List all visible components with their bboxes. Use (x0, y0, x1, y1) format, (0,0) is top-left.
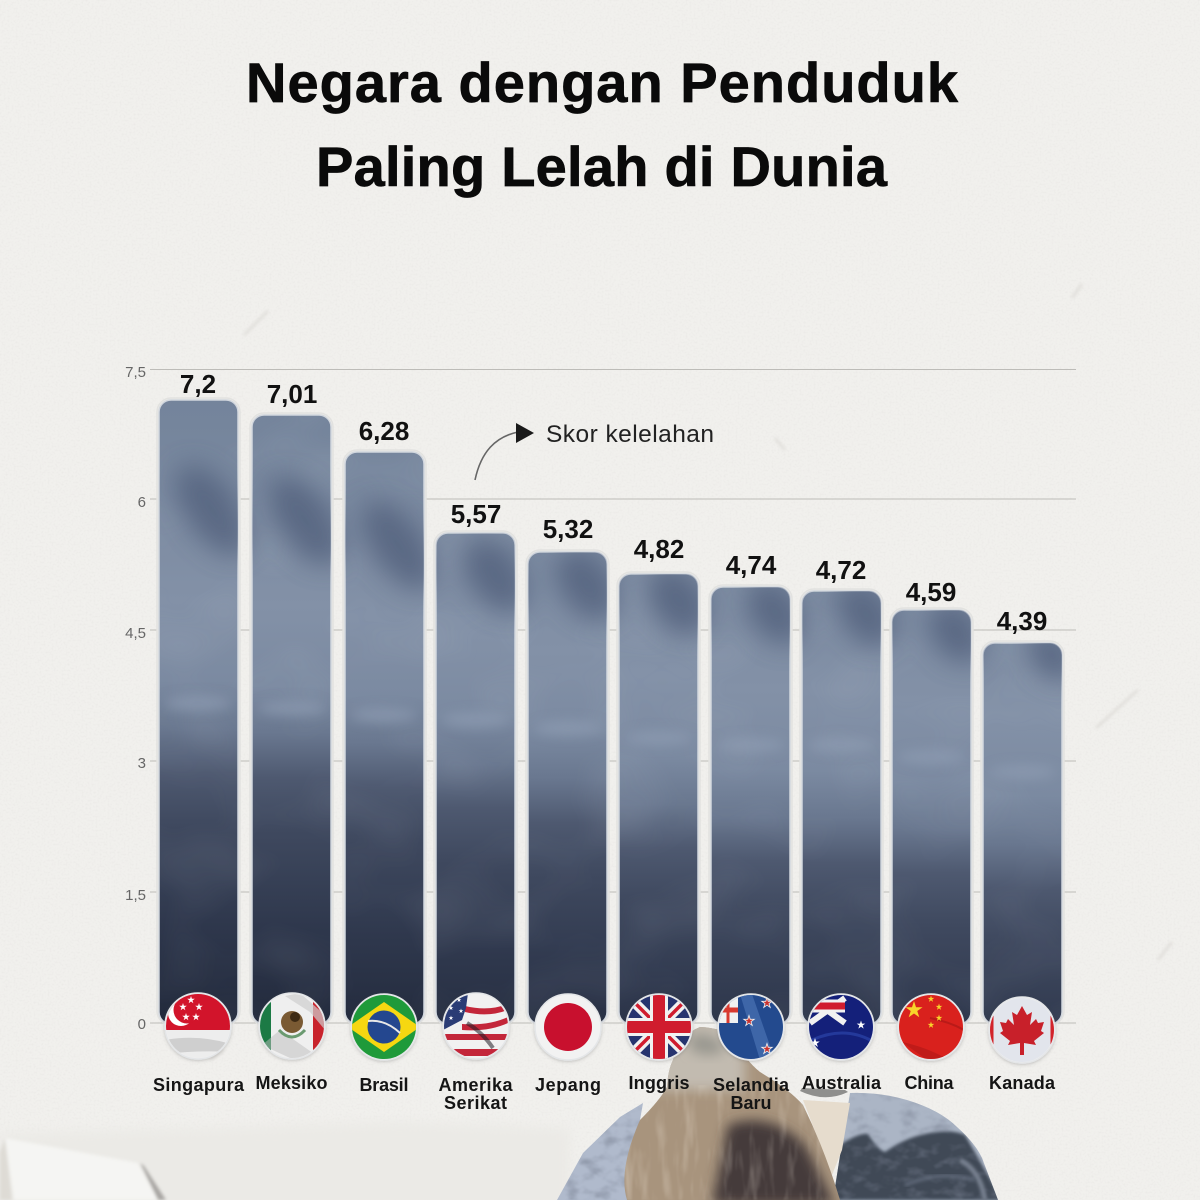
value labels: 5,32 (543, 514, 593, 544)
flag: Inggris (626, 994, 692, 1060)
y axis gridlines and labels: 4,5 (125, 625, 146, 642)
country labels: Jepang (535, 1075, 601, 1095)
background photo: tired person (550, 1020, 1002, 1200)
bar chart (157, 398, 1064, 1025)
value labels: 4,82 (634, 534, 684, 564)
flag: Brasil (348, 994, 420, 1060)
title: Negara dengan Penduduk (246, 51, 959, 114)
bar: Inggris (617, 572, 700, 1025)
person: hair (624, 1027, 840, 1200)
person: collar shadow (800, 1088, 848, 1097)
value labels: 4,72 (816, 555, 866, 585)
country labels: Australia (802, 1073, 882, 1093)
value labels: 6,28 (359, 416, 409, 446)
country labels: Amerika (438, 1075, 513, 1095)
person: right sweater (830, 1090, 1002, 1200)
annotation label: Skor kelelahan (546, 421, 714, 448)
flag: Jepang (535, 994, 601, 1060)
y axis gridlines and labels: 1,5 (125, 887, 146, 904)
country labels: Meksiko (256, 1073, 328, 1093)
flag: Australia (808, 994, 874, 1060)
country labels: China (904, 1073, 954, 1093)
bar: Brasil (343, 450, 426, 1025)
value labels: 4,74 (726, 550, 777, 580)
bar: China (890, 608, 973, 1025)
person: collar skin (803, 1100, 850, 1175)
country labels: Brasil (360, 1075, 408, 1095)
bar: Selandia Baru (709, 585, 792, 1025)
bar: Australia (800, 589, 883, 1025)
bar: Singapura (157, 398, 240, 1025)
y axis gridlines and labels: 3 (138, 755, 146, 772)
country labels: Kanada (989, 1073, 1056, 1093)
value labels (180, 369, 1047, 636)
arrow: score annotation (475, 423, 534, 480)
country labels: Baru (730, 1093, 772, 1113)
bar: Jepang (526, 550, 609, 1025)
flag: Singapura (165, 993, 231, 1060)
flag: Amerika Serikat (443, 993, 510, 1059)
y axis gridlines and labels: 6 (138, 494, 146, 511)
y axis gridlines and labels: 7,5 (125, 364, 146, 381)
value labels: 4,39 (997, 606, 1047, 636)
flag: Kanada (989, 997, 1055, 1063)
bar: Meksiko (250, 413, 333, 1025)
flag: Meksiko (259, 993, 325, 1059)
country labels: Singapura (153, 1075, 245, 1095)
person: left sleeve (557, 1103, 643, 1200)
bar cloud texture (159, 459, 1062, 986)
title (246, 51, 959, 198)
y axis gridlines and labels: 0 (138, 1016, 146, 1033)
y axis gridlines and labels (125, 364, 1076, 1033)
background photo: laptop (0, 1138, 166, 1200)
value labels: 4,59 (906, 577, 956, 607)
country labels: Selandia (713, 1075, 790, 1095)
bar: Amerika Serikat (434, 531, 517, 1025)
country labels: Serikat (444, 1093, 507, 1113)
flag: China (898, 994, 964, 1062)
value labels: 5,57 (451, 499, 501, 529)
bar: Kanada (981, 641, 1064, 1025)
flag: Selandia Baru (718, 994, 784, 1060)
country labels: Inggris (628, 1073, 690, 1093)
value labels: 7,2 (180, 369, 216, 399)
title: Paling Lelah di Dunia (316, 135, 888, 198)
value labels: 7,01 (267, 379, 317, 409)
country labels (153, 1073, 1056, 1113)
